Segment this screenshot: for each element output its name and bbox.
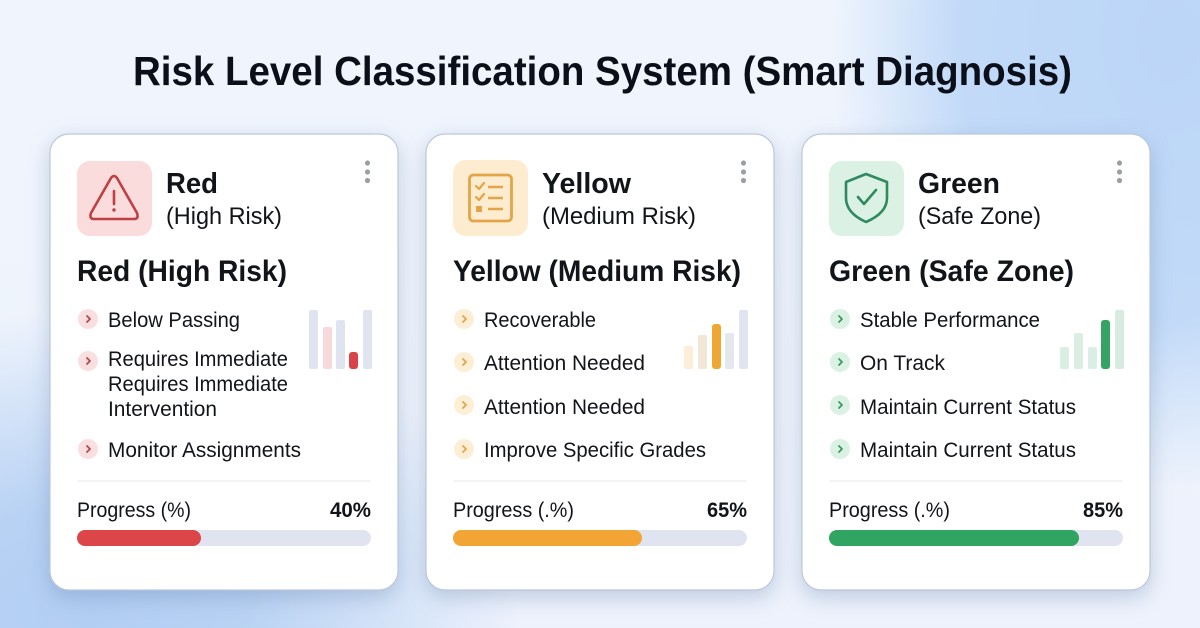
- bullet list: Monitor Assignments: [108, 439, 301, 462]
- panel: red high risk: [50, 134, 398, 590]
- card name: [542, 168, 696, 230]
- bullet list: [830, 309, 1076, 462]
- progress: [829, 499, 1123, 546]
- mini bar chart: [684, 310, 748, 369]
- bullet list: Attention Needed: [484, 396, 645, 419]
- bullet list: Requires Immediate: [108, 348, 288, 371]
- card name: [918, 168, 1041, 230]
- heading: Yellow (Medium Risk): [453, 255, 741, 288]
- progress: [453, 499, 747, 546]
- menu dots: [365, 160, 370, 183]
- card name: [166, 168, 282, 230]
- icon: shield check: [829, 161, 904, 236]
- card name: Red: [166, 168, 218, 200]
- bullet list: Requires Immediate: [108, 373, 288, 396]
- panel: yellow medium risk: [426, 134, 774, 590]
- bullet list: On Track: [860, 352, 945, 375]
- progress: 85%: [1083, 499, 1123, 522]
- bullet list: Below Passing: [108, 309, 240, 332]
- bullet list: Maintain Current Status: [860, 439, 1076, 462]
- panel: green safe zone: [802, 134, 1150, 590]
- menu dots: [741, 160, 746, 183]
- mini bar chart: [1060, 310, 1124, 369]
- progress: Progress (%): [77, 499, 191, 522]
- card name: (Medium Risk): [542, 203, 696, 230]
- card name: Green: [918, 168, 1000, 200]
- card name: Yellow: [542, 168, 631, 200]
- bullet list: Improve Specific Grades: [484, 439, 706, 462]
- bullet list: [454, 309, 706, 462]
- icon: warning triangle: [77, 161, 152, 236]
- icon: checklist: [453, 160, 528, 236]
- bullet list: Maintain Current Status: [860, 396, 1076, 419]
- progress: Progress (.%): [829, 499, 950, 522]
- card name: (High Risk): [166, 203, 282, 230]
- heading: Green (Safe Zone): [829, 255, 1074, 288]
- progress: Progress (.%): [453, 499, 574, 522]
- bullet list: Attention Needed: [484, 352, 645, 375]
- card name: (Safe Zone): [918, 203, 1041, 230]
- bullet list: Stable Performance: [860, 309, 1040, 332]
- bullet list: [78, 309, 301, 462]
- bullet list: Intervention: [108, 398, 217, 421]
- progress: [77, 499, 371, 546]
- progress: 65%: [707, 499, 747, 522]
- title: Risk Level Classification System (Smart Diagnosis): [133, 48, 1072, 94]
- progress: 40%: [330, 499, 371, 522]
- heading: Red (High Risk): [77, 255, 287, 288]
- bullet list: Recoverable: [484, 309, 596, 332]
- menu dots: [1117, 160, 1122, 183]
- mini bar chart: [309, 310, 372, 369]
